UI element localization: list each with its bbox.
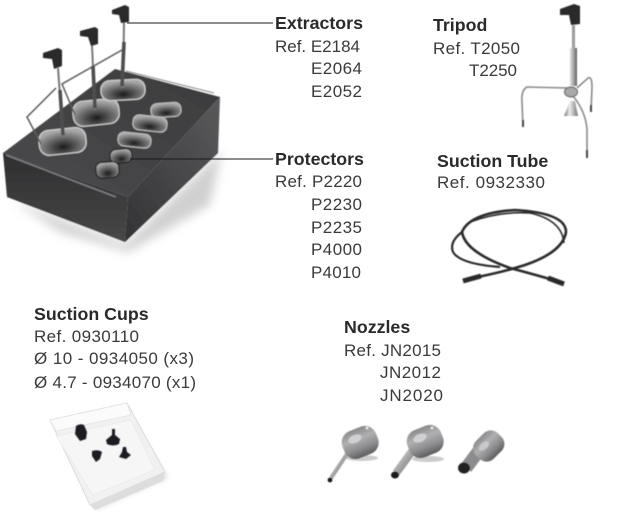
nozzle three [458, 426, 509, 474]
icon: extractor station with protectors [3, 5, 222, 252]
text: suction tube [437, 151, 548, 192]
text: protectors: P4010 [311, 263, 361, 282]
text: suction cups: Ref. 0930110 [34, 327, 139, 346]
text: protectors: Ref. P2220 [275, 172, 362, 191]
text: tripod: T2250 [469, 61, 517, 80]
text: tripod: Ref. T2050 [433, 39, 520, 58]
text: nozzles: Nozzles [344, 317, 410, 337]
text: tripod: Tripod [433, 15, 487, 35]
text: suction cups: Ø 10 - 0934050 (x3) [34, 349, 194, 368]
nozzle two [391, 421, 447, 478]
handles [43, 48, 62, 69]
text: tripod [433, 15, 520, 80]
text: protectors: Protectors [275, 149, 364, 169]
text: nozzles: JN2020 [380, 386, 443, 405]
nozzle one [328, 422, 382, 482]
small wells [151, 102, 181, 118]
text: protectors: P2230 [311, 195, 362, 214]
text: extractors [275, 13, 363, 101]
text: extractors: Ref. E2184 [275, 37, 360, 56]
text: nozzles: Ref. JN2015 [344, 341, 441, 360]
leader line: protectors [130, 158, 273, 160]
text: suction cups [34, 304, 196, 392]
extractor wires [27, 88, 56, 144]
icon: nozzles [328, 421, 509, 482]
icon: suction tube [452, 210, 566, 284]
text: suction tube: Ref. 0932330 [437, 173, 545, 192]
large wells [38, 127, 87, 156]
leader line: extractors [127, 22, 273, 24]
text: extractors: E2052 [311, 82, 362, 101]
text: extractors: E2064 [311, 59, 362, 78]
text: suction cups: Ø 4.7 - 0934070 (x1) [34, 373, 196, 392]
icon: suction cups case [50, 403, 168, 510]
shafts [58, 68, 63, 137]
text: extractors: Extractors [275, 13, 363, 33]
text: protectors: P2235 [311, 218, 362, 237]
text: suction tube: Suction Tube [437, 151, 548, 171]
text: protectors: P4000 [311, 240, 362, 259]
text: protectors [275, 149, 364, 282]
text: suction cups: Suction Cups [34, 304, 149, 324]
icon: tripod [522, 4, 592, 158]
text: nozzles: JN2012 [380, 363, 441, 382]
text: nozzles [344, 317, 443, 405]
